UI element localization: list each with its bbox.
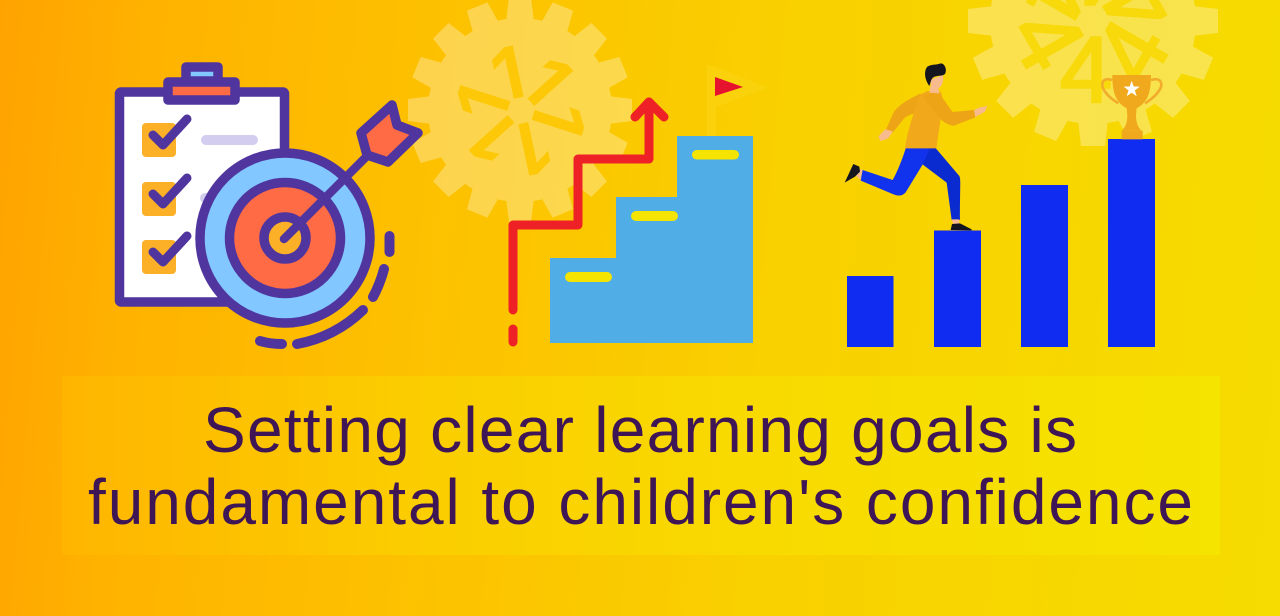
- gear with fours: [968, 0, 1218, 146]
- title panel: [62, 376, 1220, 555]
- title text: [88, 394, 1193, 538]
- gear with ones: 1: [435, 63, 541, 139]
- icon: clipboard checklist: [120, 67, 284, 302]
- icon: trophy: [1102, 75, 1161, 139]
- bar chart: [847, 139, 1155, 347]
- arrow: rising red path: [513, 102, 664, 342]
- arrow fletching: [361, 105, 418, 162]
- step highlights: [565, 150, 739, 282]
- icon: target with arrow: [200, 105, 418, 344]
- figure: running person: [845, 63, 987, 230]
- checklist row 3: [142, 236, 187, 274]
- checklist row 2: [142, 178, 240, 216]
- checklist row 1: [142, 119, 258, 157]
- arrow shaft: [284, 157, 366, 239]
- gear with ones: 1: [496, 92, 563, 195]
- title text: Setting clear learning goals is: [203, 394, 1077, 466]
- gear with ones: [408, 0, 632, 222]
- motion dashes: [260, 236, 390, 344]
- clipboard clip: [168, 67, 235, 100]
- icon: staircase: [550, 136, 753, 343]
- icon: flag on stairs: [707, 65, 768, 136]
- legs: [845, 147, 972, 230]
- gear with fours: 4: [1073, 2, 1190, 100]
- gear with ones: 1: [445, 84, 548, 184]
- title text: fundamental to children's confidence: [88, 466, 1193, 538]
- upper body: [878, 63, 987, 148]
- gear with ones: 1: [501, 82, 607, 158]
- gear with ones: 1: [494, 37, 597, 137]
- gear with ones: 1: [479, 26, 546, 129]
- gear with fours: 4: [1060, 17, 1112, 122]
